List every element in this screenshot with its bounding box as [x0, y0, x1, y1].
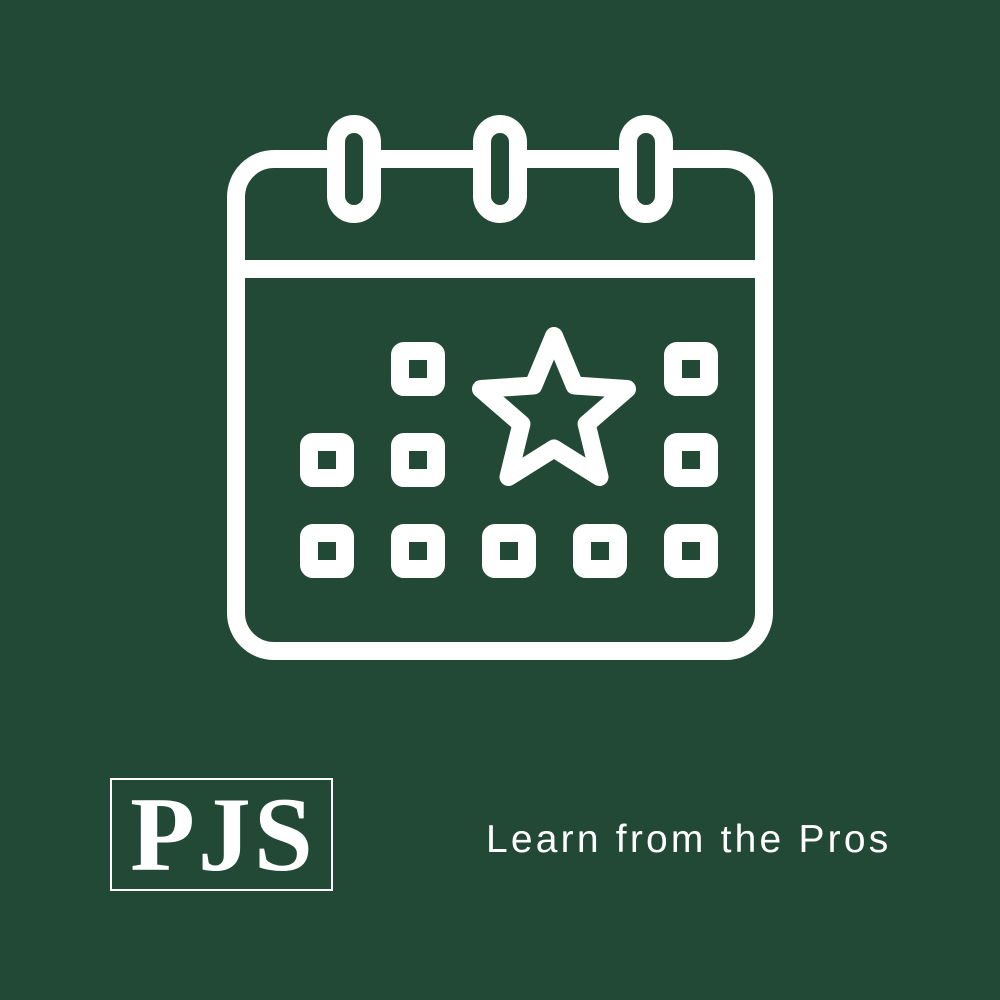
logo: PJS: PJS: [130, 776, 316, 893]
star: [481, 336, 627, 477]
tagline: Learn from the Pros: [486, 818, 891, 861]
icon: calendar with star: [227, 115, 773, 660]
calendar rings: [336, 124, 664, 214]
calendar day squares: [309, 351, 709, 569]
